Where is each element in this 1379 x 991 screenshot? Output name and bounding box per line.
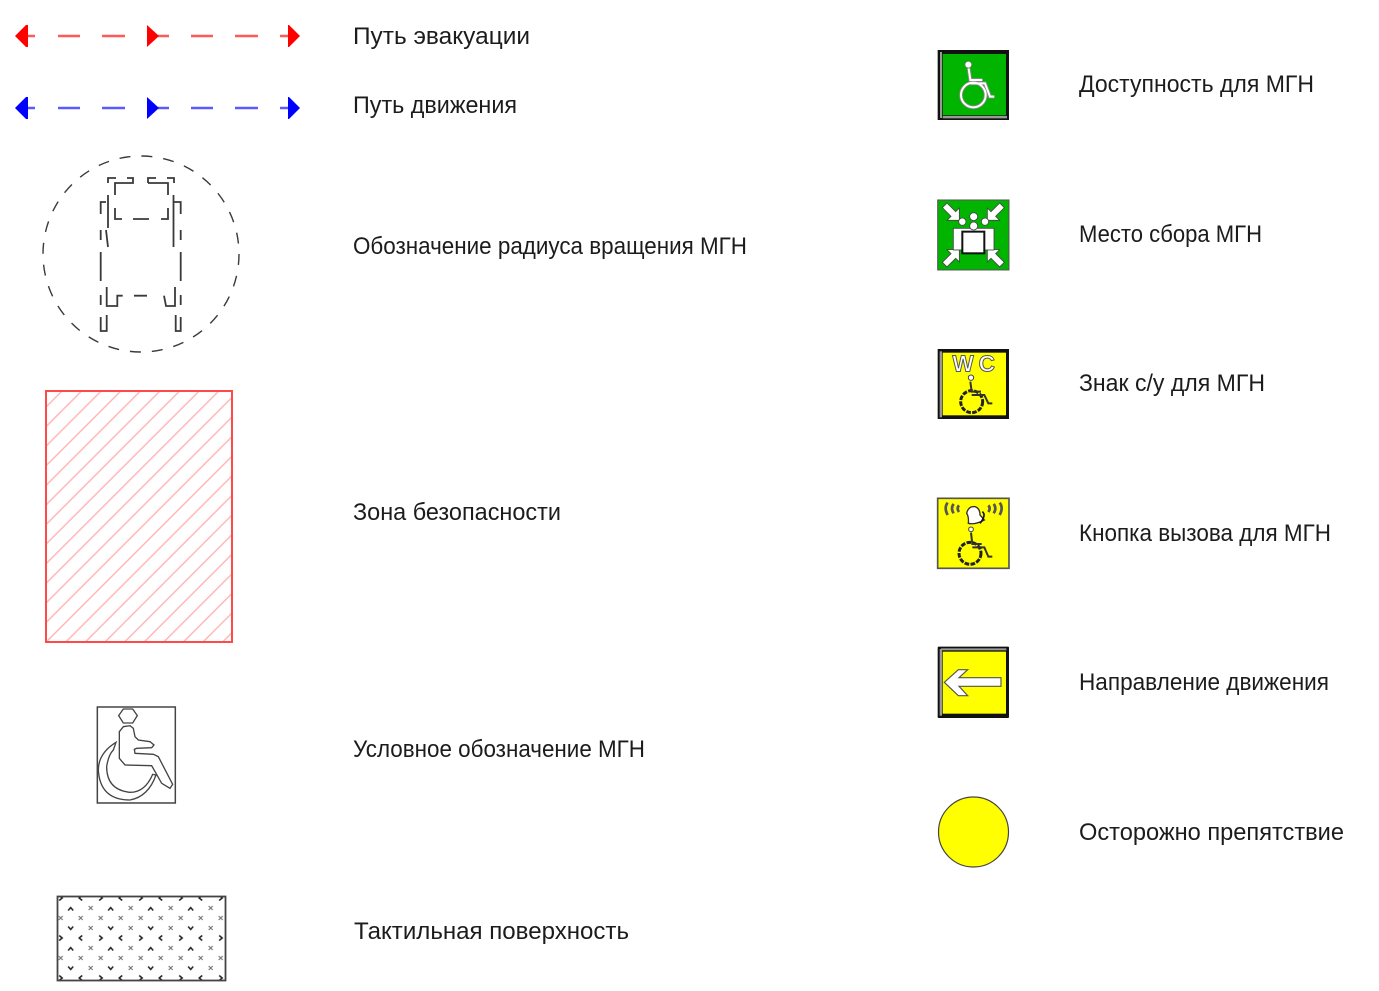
icon: yellow WC sign (938, 349, 1009, 419)
icon: red hatched safety zone (46, 391, 232, 642)
icon: tactile surface swatch (58, 896, 226, 980)
icon: green accessibility sign (938, 50, 1009, 120)
arrow line: red dashed evacuation route (15, 25, 300, 47)
label: assembly point: Место сбора МГН (1079, 221, 1262, 248)
legend row: accessibility sign (938, 50, 1314, 120)
label: WC sign: Знак с/у для МГН (1079, 370, 1265, 397)
legend row: tactile surface (58, 896, 629, 980)
legend row: turning radius (43, 156, 747, 352)
label: direction: Направление движения (1079, 669, 1329, 696)
legend row: obstacle caution (938, 797, 1344, 867)
icon: yellow obstacle circle (938, 797, 1008, 867)
label: evacuation route: Путь эвакуации (353, 23, 530, 50)
legend row: WC sign (938, 349, 1265, 419)
label: tactile surface: Тактильная поверхность (354, 918, 629, 945)
icon: yellow call button sign (938, 498, 1009, 568)
label: obstacle caution: Осторожно препятствие (1079, 819, 1344, 846)
label: movement route: Путь движения (353, 92, 517, 119)
legend row: movement route (15, 92, 517, 119)
legend row: MGN symbol (97, 707, 645, 803)
text: WC: WC (952, 351, 995, 377)
icon: outlined wheelchair symbol (97, 707, 175, 803)
icon: yellow direction arrow sign (938, 647, 1009, 718)
icon: dashed turning circle with wheelchair plan (43, 156, 239, 352)
arrow line: blue dashed movement route (15, 97, 300, 119)
legend row: assembly point sign (938, 200, 1262, 270)
legend row: evacuation route (15, 23, 530, 50)
legend row: call button sign (938, 498, 1331, 568)
label: turning radius: Обозначение радиуса вращения МГН (353, 233, 747, 260)
label: accessibility: Доступность для МГН (1079, 71, 1314, 98)
legend row: safety zone (46, 391, 561, 642)
legend row: direction sign (938, 647, 1329, 718)
label: call button: Кнопка вызова для МГН (1079, 520, 1331, 547)
label: safety zone: Зона безопасности (353, 499, 561, 526)
label: MGN symbol: Условное обозначение МГН (353, 736, 645, 763)
icon: green assembly point sign (938, 200, 1009, 270)
